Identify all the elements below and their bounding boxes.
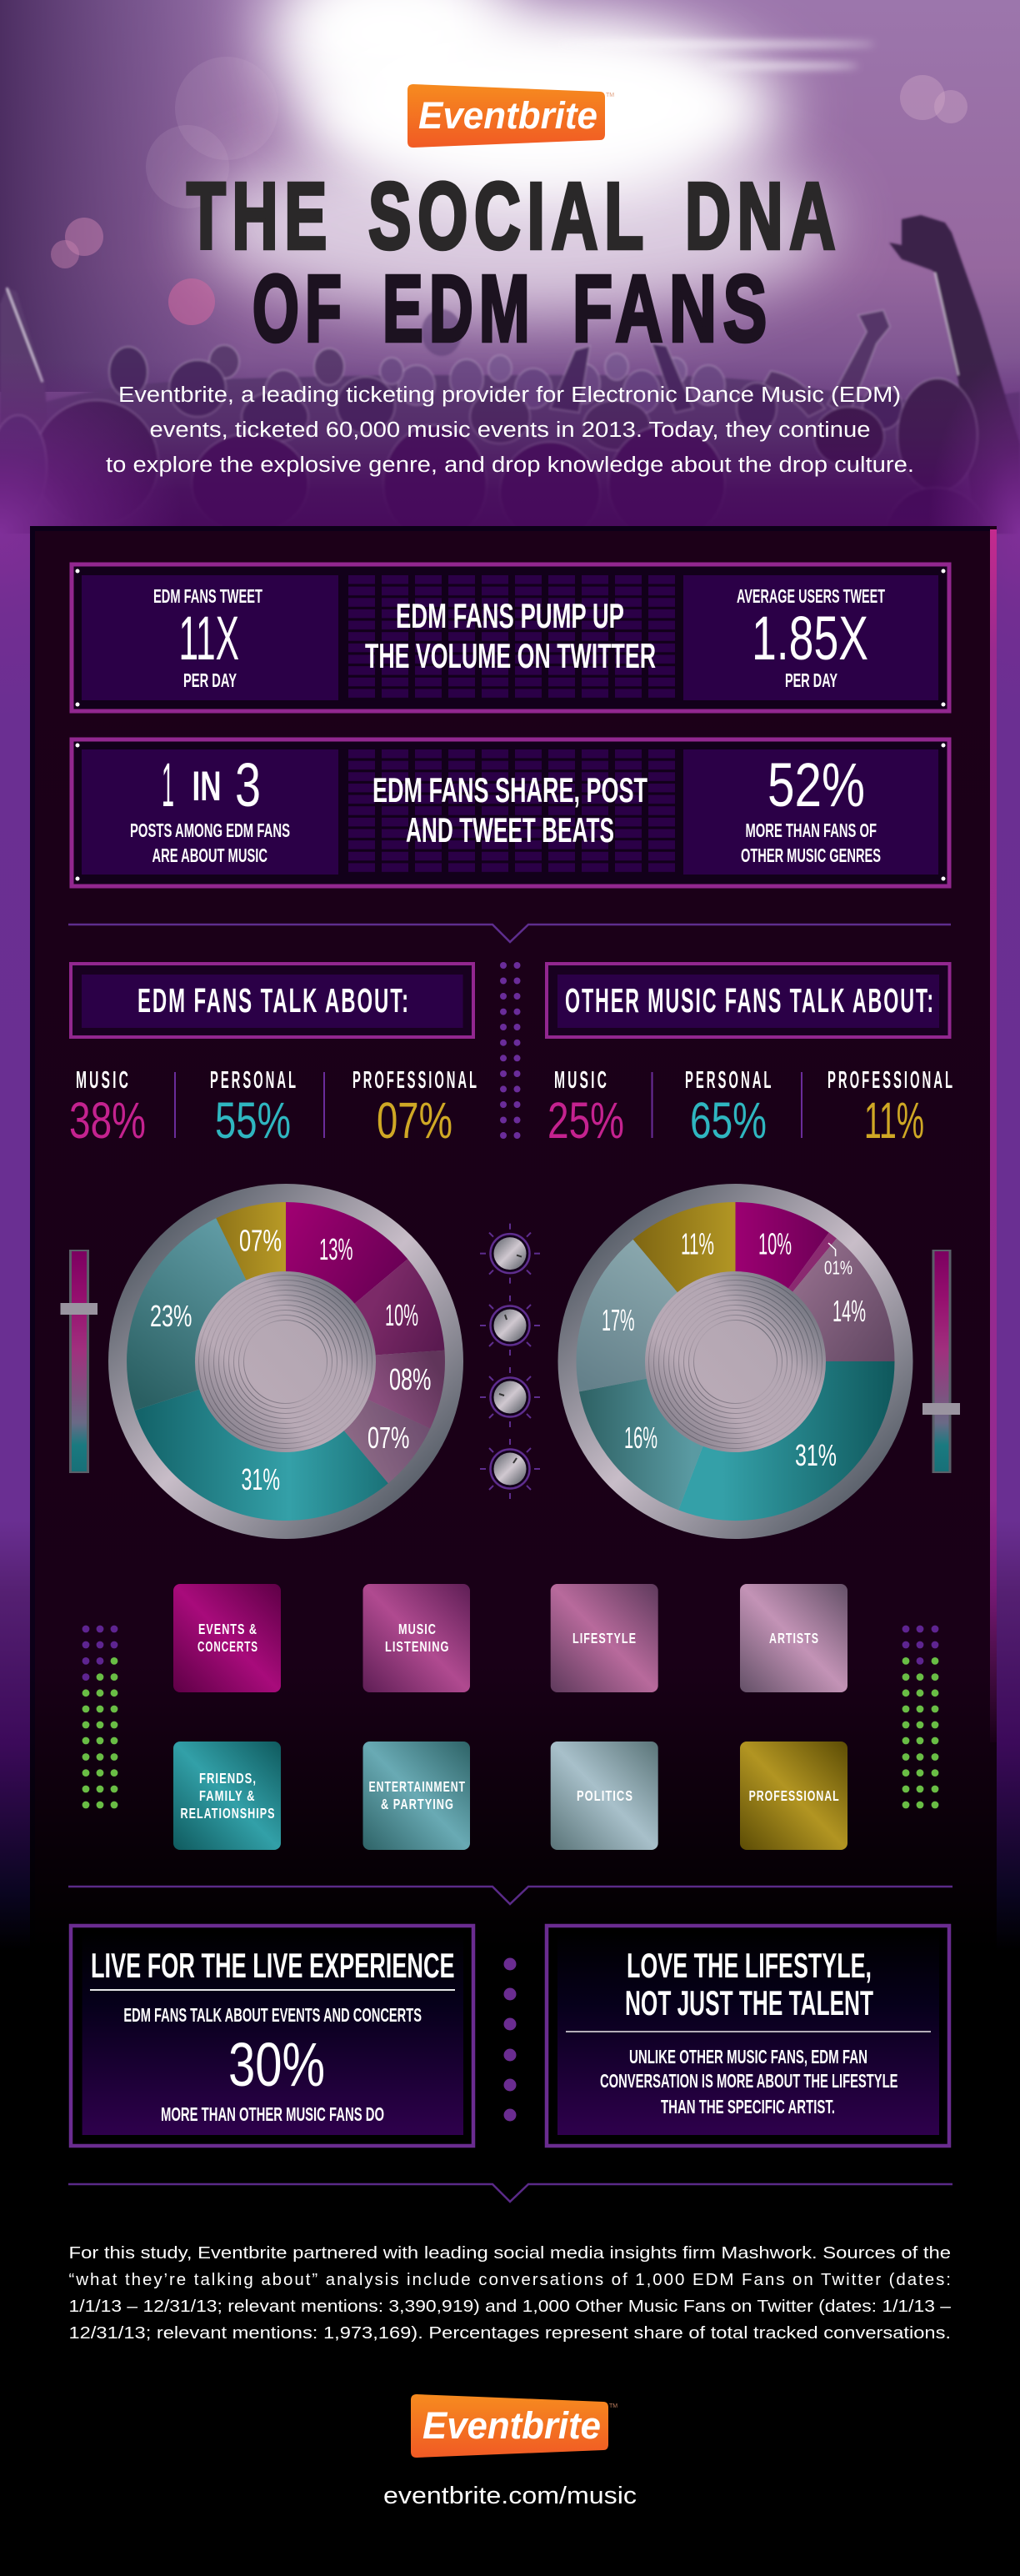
slice labels: 31% <box>242 1462 280 1496</box>
average users tweet stat: AVERAGE USERS TWEET <box>737 585 885 607</box>
other music fans category totals: 25% <box>548 1092 624 1149</box>
legend tile: politics <box>551 1742 658 1850</box>
legend tile: friends family relationships: FRIENDS, <box>199 1770 257 1787</box>
52 percent stat: 52% <box>768 750 865 819</box>
EDM fans category totals: 07% <box>377 1092 452 1149</box>
legend tile: artists: ARTISTS <box>769 1630 819 1646</box>
EDM fans category totals: PROFESSIONAL <box>352 1067 479 1094</box>
main dark panel <box>30 526 997 1952</box>
heading: share post tweet: EDM FANS SHARE, POST <box>372 770 648 809</box>
stat cell right <box>683 749 938 875</box>
left level meter dots <box>82 1626 118 1808</box>
panel: live for the live experience <box>71 1926 473 2146</box>
equalizer grid <box>348 575 675 700</box>
right slider <box>922 1250 960 1473</box>
slice labels: 01% <box>824 1257 852 1279</box>
heading: share post tweet <box>372 770 648 849</box>
panel: tweets per day <box>72 564 949 711</box>
slice labels <box>150 1224 432 1496</box>
legend tile: entertainment and partying: ENTERTAINMENT <box>368 1778 466 1795</box>
slice labels <box>602 1227 866 1472</box>
divider arrow <box>68 2184 952 2202</box>
legend tile: events and concerts: CONCERTS <box>198 1638 258 1655</box>
52 percent stat: MORE THAN FANS OF <box>745 819 877 841</box>
intro paragraph <box>106 383 914 477</box>
equalizer grid <box>348 749 675 875</box>
other music fans category totals: MUSIC <box>554 1067 609 1094</box>
Eventbrite logo <box>408 84 614 148</box>
legend tile: entertainment and partying: & PARTYING <box>381 1796 454 1812</box>
title <box>187 163 842 361</box>
EDM fans tweet stat: PER DAY <box>183 669 237 691</box>
1 in 3 stat: 3 <box>235 750 261 819</box>
legend tile: lifestyle: LIFESTYLE <box>572 1630 637 1646</box>
legend tile: friends family relationships <box>173 1742 281 1850</box>
legend tile: music listening: MUSIC <box>398 1621 437 1637</box>
divider arrow <box>68 925 951 942</box>
title: OF <box>252 256 348 361</box>
panel: live for the live experience: EDM FANS TALK ABOUT EVENTS AND CONCERTS <box>123 2004 422 2026</box>
1 in 3 stat <box>130 750 290 866</box>
slice labels: 16% <box>624 1421 658 1455</box>
heading: share post tweet: AND TWEET BEATS <box>406 810 614 849</box>
52 percent stat <box>741 750 881 866</box>
1 in 3 stat: ARE ABOUT MUSIC <box>152 844 268 866</box>
average users tweet stat <box>737 585 885 691</box>
slice labels: 17% <box>602 1303 635 1337</box>
right turntable pie chart <box>558 1184 913 1539</box>
Eventbrite footer logo: Eventbrite <box>422 2404 601 2447</box>
methodology footnote: “what they’re talking about” analysis include conversations of 1,000 EDM Fans on Twitter (dates: <box>68 2270 951 2289</box>
EDM fans tweet stat <box>153 585 262 691</box>
slice labels: 14% <box>832 1294 866 1328</box>
panel: share, post and tweet beats <box>72 739 949 886</box>
methodology footnote: 12/31/13; relevant mentions: 1,973,169). Percentages represent share of total tracked conversations. <box>68 2323 951 2343</box>
panel: live for the live experience: LIVE FOR THE LIVE EXPERIENCE <box>91 1946 455 1985</box>
EDM fans category totals: 55% <box>215 1092 291 1149</box>
left slider <box>60 1250 98 1473</box>
slice labels: 13% <box>319 1232 353 1266</box>
slice labels: 11% <box>681 1227 714 1261</box>
panel: love the lifestyle: LOVE THE LIFESTYLE, <box>627 1946 872 1985</box>
EDM fans category totals: MUSIC <box>76 1067 131 1094</box>
methodology footnote: For this study, Eventbrite partnered with leading social media insights firm Mashwork. Sources of the <box>68 2243 951 2263</box>
average users tweet stat: 1.85X <box>752 604 868 673</box>
heading: pump up the volume: THE VOLUME ON TWITTER <box>365 636 656 675</box>
corner screws <box>75 569 945 707</box>
legend tile: friends family relationships: FAMILY & <box>199 1787 255 1804</box>
EDM fans tweet stat: EDM FANS TWEET <box>153 585 262 607</box>
52 percent stat: OTHER MUSIC GENRES <box>741 844 881 866</box>
slice labels: 07% <box>368 1421 410 1455</box>
legend tile: music listening <box>363 1584 470 1692</box>
Eventbrite footer logo <box>411 2394 618 2458</box>
legend tile: lifestyle <box>551 1584 658 1692</box>
legend tile: entertainment and partying <box>363 1742 470 1850</box>
legend tile: politics: POLITICS <box>577 1787 633 1804</box>
panel: love the lifestyle: UNLIKE OTHER MUSIC FANS, EDM FAN <box>629 2046 868 2067</box>
legend tile: artists <box>740 1584 848 1692</box>
mixer knob 3 <box>480 1367 540 1427</box>
legend tile: friends family relationships: RELATIONSHIPS <box>180 1805 275 1822</box>
stat cell left <box>82 749 338 875</box>
1 in 3 stat: POSTS AMONG EDM FANS <box>130 819 290 841</box>
Eventbrite logo: TM <box>606 93 614 98</box>
slice labels: 10% <box>758 1227 792 1261</box>
title: SOCIAL <box>368 163 650 268</box>
stat cell right <box>683 575 938 700</box>
vinyl record <box>195 1271 376 1452</box>
legend tile: music listening: LISTENING <box>385 1638 450 1655</box>
panel: live for the live experience: 30% <box>228 2030 325 2099</box>
hero concert photo background <box>0 0 1020 717</box>
EDM fans category totals <box>69 1067 479 1149</box>
other music fans category totals: 65% <box>690 1092 767 1149</box>
center dots between panels <box>503 1957 517 2121</box>
center dot columns <box>500 962 520 1139</box>
panel: love the lifestyle <box>547 1926 949 2146</box>
EDM fans category totals: PERSONAL <box>210 1067 298 1094</box>
other music fans category totals: 11% <box>864 1092 924 1149</box>
Eventbrite logo: Eventbrite <box>418 94 598 137</box>
panel: love the lifestyle: THAN THE SPECIFIC ARTIST. <box>661 2096 835 2117</box>
mixer knob 1 <box>480 1224 540 1284</box>
heading: other music fans talk about <box>547 964 950 1037</box>
slice labels: 08% <box>389 1362 432 1396</box>
vinyl record <box>645 1271 826 1452</box>
1 in 3 stat: IN <box>192 763 222 809</box>
slice labels: 31% <box>795 1438 837 1472</box>
heading: pump up the volume: EDM FANS PUMP UP <box>396 596 624 635</box>
title: THE <box>187 163 333 268</box>
crowd silhouettes <box>0 215 1020 542</box>
Eventbrite footer logo: TM <box>609 2403 618 2409</box>
corner screws <box>75 744 945 880</box>
slice labels: 23% <box>150 1299 192 1333</box>
intro paragraph: to explore the explosive genre, and drop knowledge about the drop culture. <box>106 454 914 477</box>
panel: love the lifestyle: NOT JUST THE TALENT <box>625 1983 873 2022</box>
other music fans category totals: PERSONAL <box>685 1067 773 1094</box>
divider arrow <box>68 1887 952 1904</box>
slice labels: 10% <box>385 1298 418 1332</box>
right level meter dots <box>902 1626 938 1808</box>
panel: live for the live experience: MORE THAN OTHER MUSIC FANS DO <box>161 2103 384 2125</box>
legend tile: events and concerts <box>173 1584 281 1692</box>
methodology footnote: 1/1/13 – 12/31/13; relevant mentions: 3,390,919) and 1,000 Other Music Fans on Twitter (dates: 1/1/13 – <box>68 2297 952 2316</box>
EDM fans category totals: 38% <box>69 1092 146 1149</box>
website URL: eventbrite.com/music <box>383 2483 637 2509</box>
title: EDM <box>382 256 536 361</box>
intro paragraph: Eventbrite, a leading ticketing provider for Electronic Dance Music (EDM) <box>118 383 901 407</box>
legend tile: professional: PROFESSIONAL <box>749 1787 840 1804</box>
legend tile: professional <box>740 1742 848 1850</box>
mixer knob 4 <box>480 1439 540 1499</box>
title: DNA <box>685 163 842 268</box>
stat cell left <box>82 575 338 700</box>
title: FANS <box>572 256 773 361</box>
heading: EDM fans talk about: EDM FANS TALK ABOUT: <box>138 981 410 1020</box>
average users tweet stat: PER DAY <box>785 669 838 691</box>
heading: EDM fans talk about <box>71 964 473 1037</box>
slice labels: 07% <box>239 1224 282 1257</box>
1 in 3 stat: 1 <box>162 750 174 819</box>
other music fans category totals <box>548 1067 955 1149</box>
heading: pump up the volume <box>365 596 656 675</box>
side band gradient behind panel <box>0 517 1020 1951</box>
EDM fans tweet stat: 11X <box>178 604 239 673</box>
mixer knob 2 <box>480 1296 540 1356</box>
intro paragraph: events, ticketed 60,000 music events in 2013. Today, they continue <box>150 418 870 442</box>
legend tile: events and concerts: EVENTS & <box>198 1621 258 1637</box>
methodology footnote <box>68 2243 952 2343</box>
left turntable pie chart <box>108 1184 463 1539</box>
